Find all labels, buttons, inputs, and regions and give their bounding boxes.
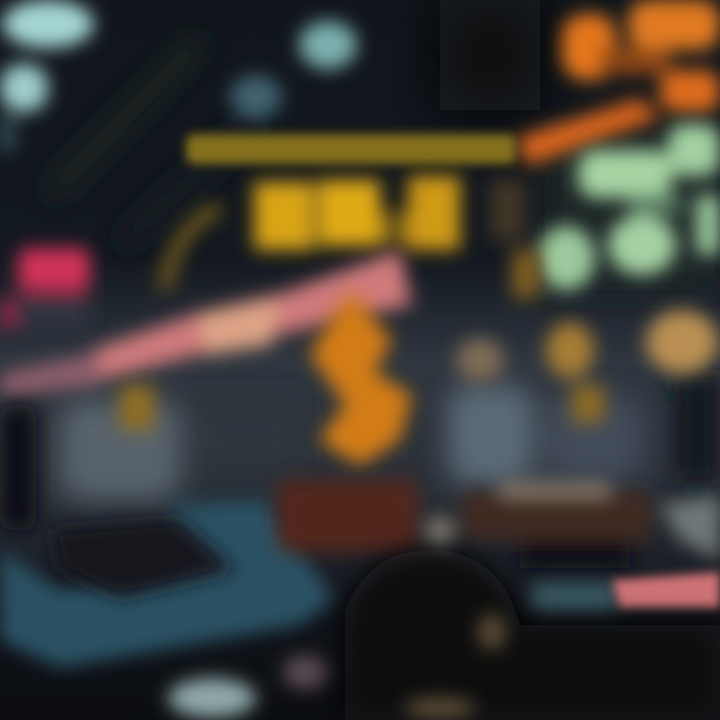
figure heads bbox=[120, 310, 718, 430]
orange sign top right bbox=[516, 0, 720, 166]
pink counter strip bbox=[612, 572, 720, 608]
ceiling beams bbox=[40, 35, 270, 250]
ceiling lights bbox=[0, 0, 357, 152]
teal table bbox=[0, 500, 335, 668]
orange dollar symbol bbox=[310, 292, 412, 466]
green sign backing bbox=[545, 130, 715, 290]
crowd of figures bbox=[60, 370, 720, 500]
right counter bbox=[530, 495, 720, 612]
gold arch and side posts bbox=[165, 180, 540, 298]
foreground dark figure bbox=[345, 550, 720, 720]
yellow NFT sign bbox=[254, 176, 460, 250]
green sign right bbox=[537, 124, 720, 290]
foreground highlights bbox=[168, 516, 506, 718]
gold sign bar bbox=[186, 134, 516, 164]
red sign left bbox=[0, 248, 90, 328]
pink banner band bbox=[0, 250, 412, 396]
background shadow top bbox=[440, 0, 540, 110]
brown table right bbox=[462, 482, 652, 568]
dark figure left bbox=[0, 405, 36, 530]
dark laptop on table bbox=[50, 520, 235, 598]
brown box bbox=[278, 480, 418, 552]
